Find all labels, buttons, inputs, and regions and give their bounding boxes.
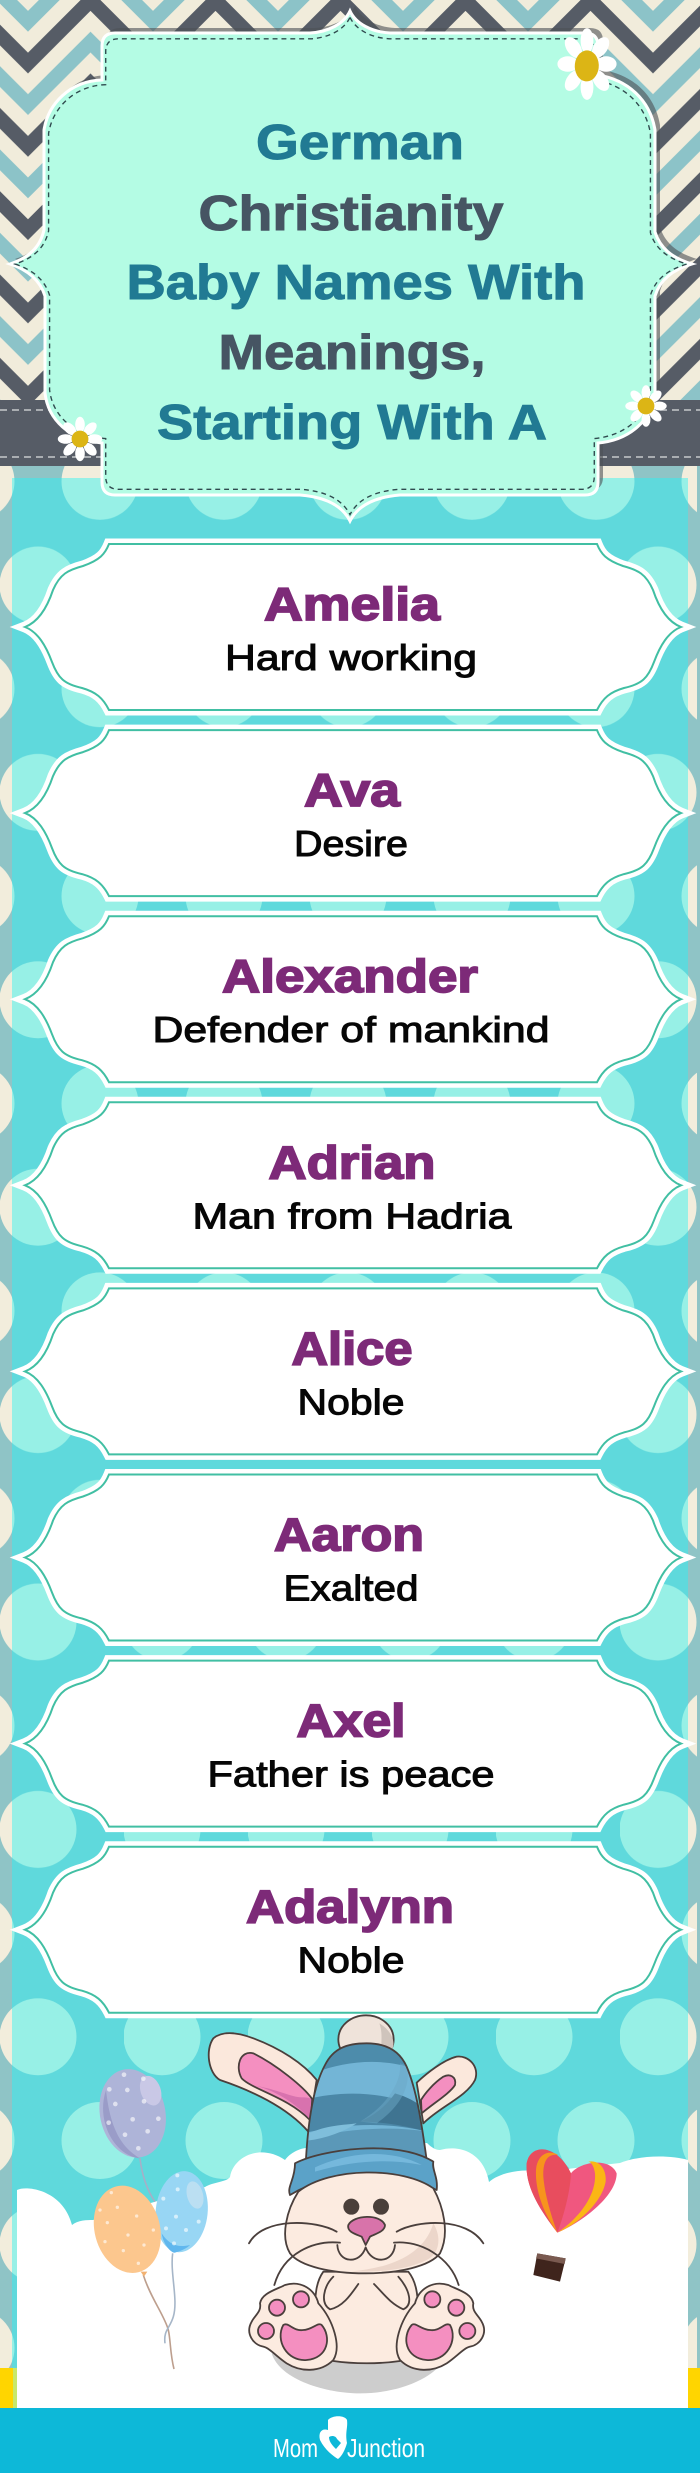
logo icon: mother and baby xyxy=(319,2416,347,2459)
background: frame right edge xyxy=(697,466,700,2408)
name card: Adalynn: Noble xyxy=(298,1940,404,1981)
icon: daisy right xyxy=(625,385,667,427)
name card: Adalynn xyxy=(25,1847,681,2013)
title badge xyxy=(10,6,697,521)
name card: Alexander: Defender of mankind xyxy=(152,1009,550,1050)
bunny shadow xyxy=(272,2353,447,2393)
name card: Aaron: Aaron xyxy=(274,1508,424,1560)
white clouds xyxy=(17,2143,688,2408)
name card: Aaron: Exalted xyxy=(284,1568,418,1608)
name card: Adrian xyxy=(25,1102,681,1268)
name card: Alice xyxy=(25,1288,681,1454)
title xyxy=(126,116,586,450)
bunny right ear xyxy=(417,2057,476,2123)
bunny left foot xyxy=(249,2284,337,2370)
icon: balloons xyxy=(84,2063,212,2369)
icon: heart hot air balloon xyxy=(527,2149,617,2282)
background: polka dot field xyxy=(12,478,688,2408)
icon: daisy bottom left xyxy=(58,417,102,461)
dark stitched ribbon xyxy=(0,400,700,466)
name card: Amelia: Amelia xyxy=(264,578,440,630)
name card: Adalynn: Adalynn xyxy=(246,1881,454,1933)
name card: Axel: Father is peace xyxy=(208,1754,494,1795)
bunny pompom xyxy=(338,2015,394,2063)
title: German xyxy=(256,116,464,170)
footer logo: MomJunction: Mom xyxy=(273,2433,318,2463)
background: chevron band xyxy=(0,0,700,402)
name card: Alice: Noble xyxy=(298,1381,404,1422)
bunny hat xyxy=(289,2040,437,2195)
background: polka dot frame xyxy=(0,466,700,2408)
footer logo: MomJunction: Junction xyxy=(347,2433,425,2463)
footer logo: MomJunction xyxy=(273,2416,425,2463)
title: Meanings, xyxy=(218,326,486,380)
name card: Alexander: Alexander xyxy=(222,950,478,1002)
name card: Axel: Axel xyxy=(296,1695,406,1747)
yellow corner strips xyxy=(0,2368,700,2408)
title: Christianity xyxy=(198,187,504,241)
name card: Adrian: Adrian xyxy=(268,1136,436,1188)
illustration: bunny in a striped hat xyxy=(209,2015,484,2393)
name card: Ava: Ava xyxy=(304,764,400,816)
name card: Amelia: Hard working xyxy=(225,637,477,678)
bunny left ear xyxy=(209,2033,317,2132)
footer bar xyxy=(0,2408,700,2473)
name card: Aaron xyxy=(25,1474,681,1640)
bunny right foot xyxy=(397,2284,484,2370)
name card: Alexander xyxy=(25,916,681,1082)
bunny body xyxy=(315,2272,418,2363)
name card: Ava xyxy=(25,730,681,896)
name card: Amelia xyxy=(25,544,681,710)
name card: Adrian: Man from Hadria xyxy=(192,1195,513,1236)
title: Baby Names With xyxy=(126,256,586,310)
name card: Axel xyxy=(25,1661,681,1827)
title: Starting With A xyxy=(157,396,547,450)
bunny head and face xyxy=(249,2172,483,2285)
icon: daisy top right xyxy=(557,28,617,100)
name card: Alice: Alice xyxy=(292,1322,412,1374)
name card: Ava: Desire xyxy=(294,823,408,864)
